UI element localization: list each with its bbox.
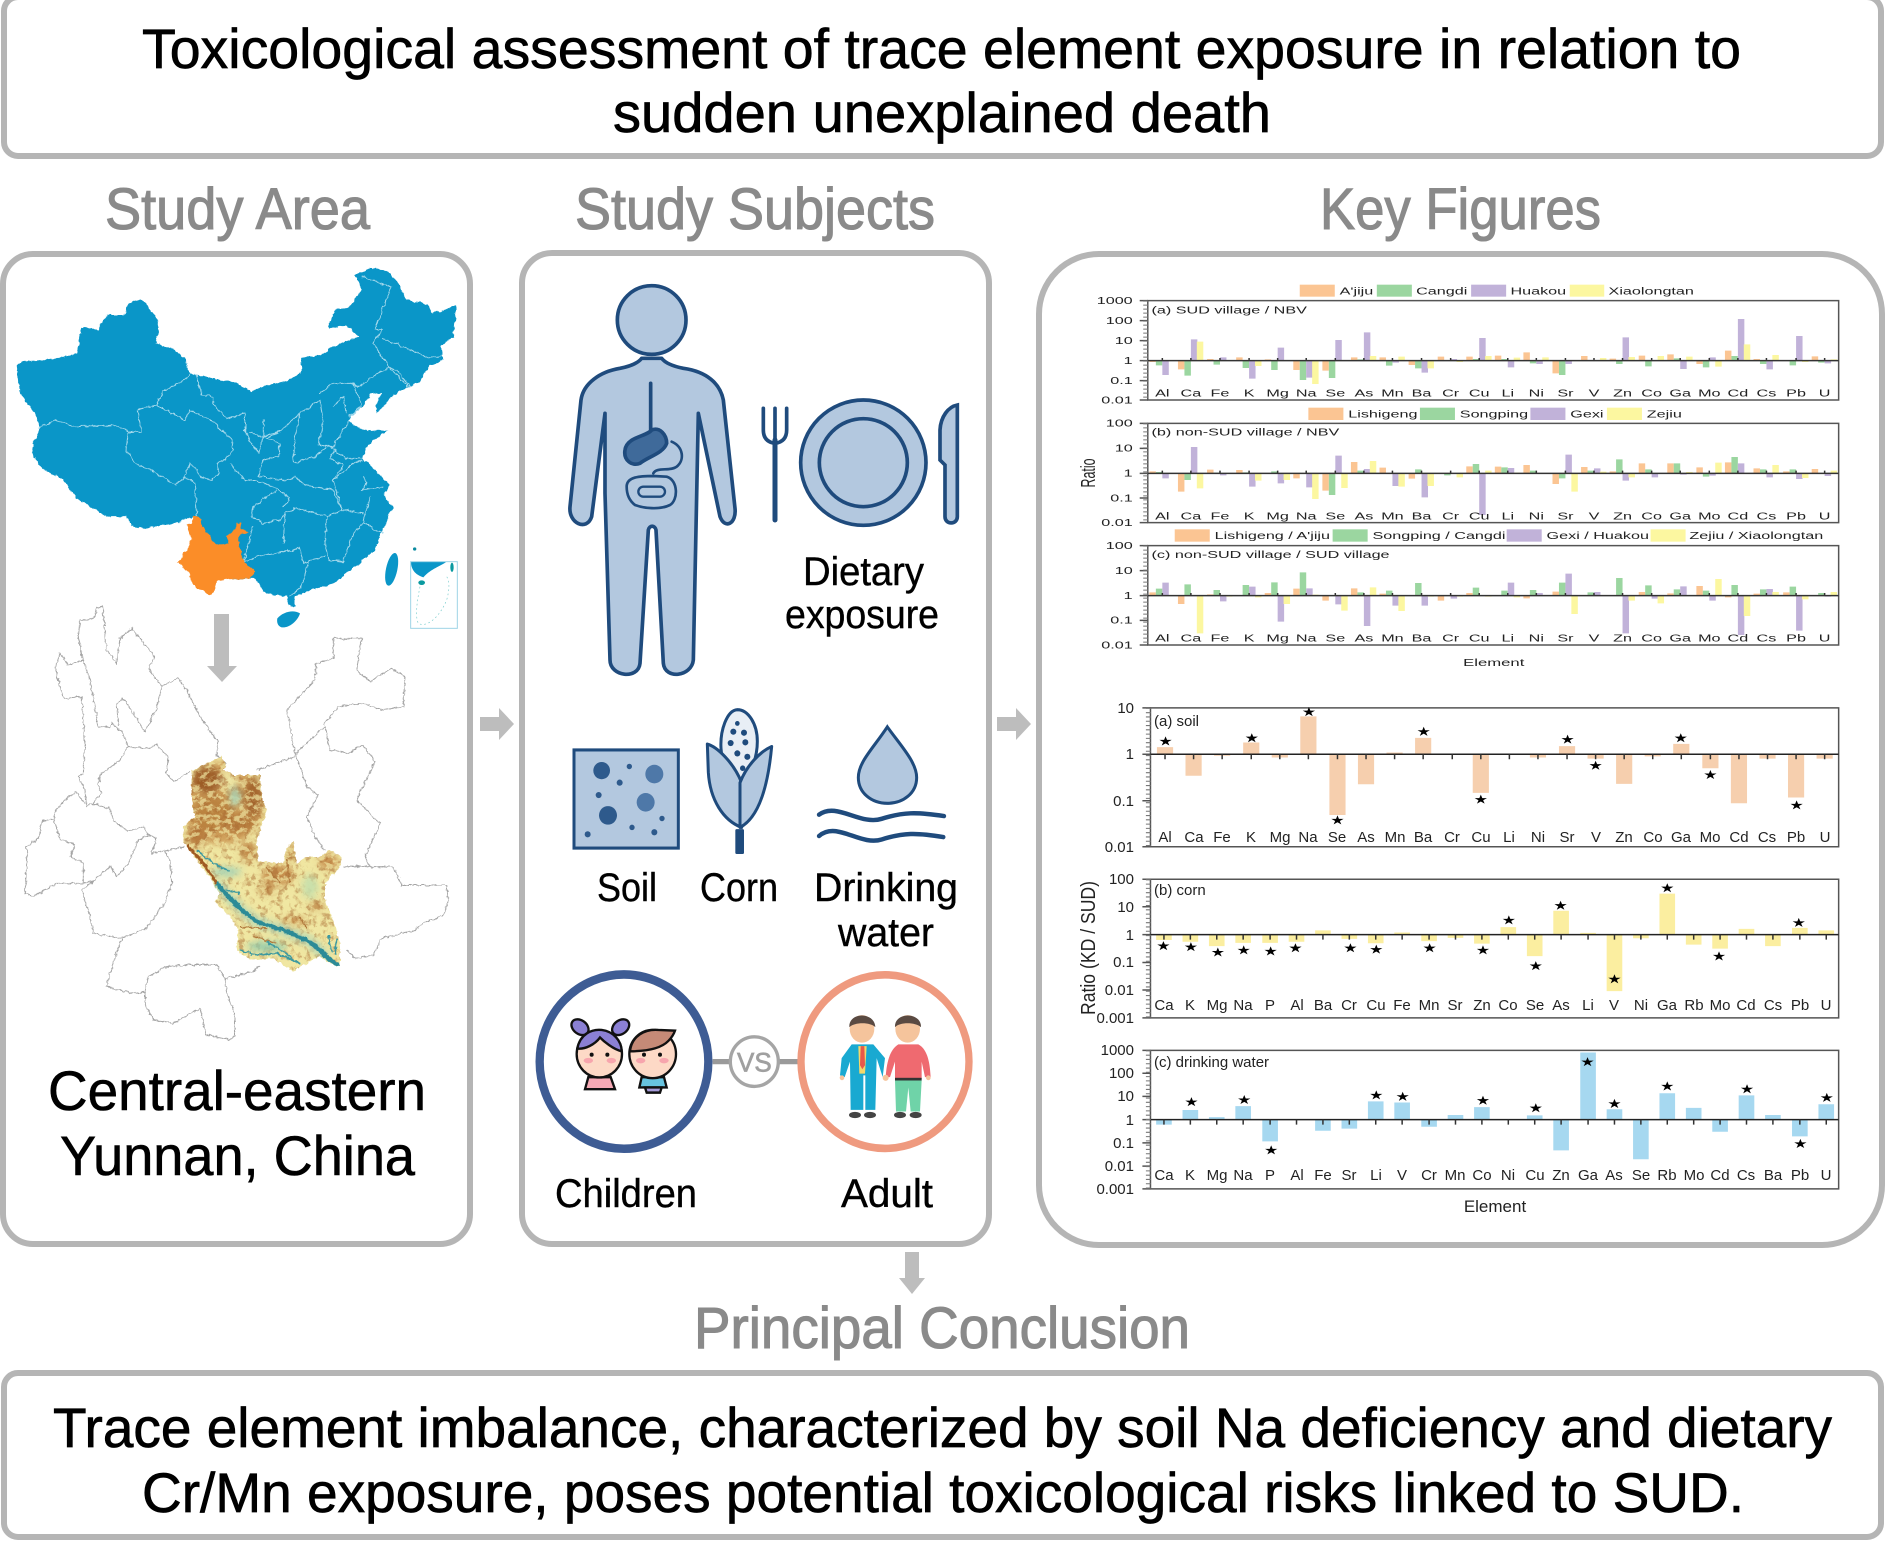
chart labels: corn: Cu bbox=[1366, 997, 1386, 1014]
chart labels: drinking water: Co bbox=[1472, 1167, 1492, 1184]
chart labels: drinking water: Cr bbox=[1421, 1167, 1437, 1184]
chart labels: drinking water bbox=[1096, 1042, 1831, 1198]
chart labels: soil: K bbox=[1246, 829, 1256, 846]
chart labels: drinking water: P bbox=[1265, 1167, 1275, 1184]
chart labels: drinking water: Cd bbox=[1710, 1167, 1730, 1184]
y labels: panel a: 1000 bbox=[1097, 295, 1133, 306]
x labels: panel a: Al bbox=[1155, 388, 1170, 399]
chart labels: soil: Mg bbox=[1270, 829, 1290, 846]
panel: study area bbox=[3, 254, 470, 1244]
legend: panel c bbox=[1175, 529, 1823, 542]
label: Central-eastern Yunnan, China: Central-eastern bbox=[48, 1059, 426, 1122]
x labels: panel c: Li bbox=[1501, 633, 1514, 644]
chart labels: corn: Ga bbox=[1657, 997, 1678, 1014]
axes: panel b bbox=[1140, 423, 1839, 523]
chart labels: drinking water: U bbox=[1821, 1167, 1831, 1184]
legend: panel c: Songping / Cangdi bbox=[1373, 530, 1506, 541]
y labels: panel b: 100 bbox=[1106, 418, 1133, 429]
chart labels: soil: Mn bbox=[1385, 829, 1405, 846]
y labels: panel b: 0.1 bbox=[1110, 492, 1133, 504]
x labels: panel b: Ni bbox=[1529, 510, 1544, 522]
legend: panel c: Gexi / Huakou bbox=[1547, 530, 1649, 541]
icon: VS connector: VS bbox=[737, 1047, 772, 1077]
icon: children in circle bbox=[540, 974, 708, 1149]
legend: panel a bbox=[1300, 285, 1694, 297]
chart labels: drinking water: Mg bbox=[1207, 1167, 1227, 1184]
panel c title: (c) non-SUD village / SUD village bbox=[1152, 549, 1390, 560]
x labels: panel c: As bbox=[1354, 633, 1374, 644]
icon: soil bbox=[574, 750, 678, 848]
x labels: panel b: Cs bbox=[1757, 510, 1777, 522]
y labels: panel a: 100 bbox=[1106, 315, 1133, 326]
x labels: panel b: Ca bbox=[1181, 510, 1202, 522]
chart labels: soil: As bbox=[1357, 829, 1375, 846]
chart labels: corn: Co bbox=[1498, 997, 1518, 1014]
y labels: panel a: 0.1 bbox=[1110, 375, 1133, 386]
chart labels: soil: Pb bbox=[1787, 829, 1805, 846]
x labels: panel c: Cd bbox=[1728, 633, 1748, 644]
x labels: panel c: Cu bbox=[1469, 633, 1490, 644]
axes: frames and ticks bbox=[1142, 708, 1839, 1189]
x labels: panel c: Pb bbox=[1786, 633, 1806, 644]
legend: panel b: Zejiu bbox=[1647, 408, 1682, 420]
chart labels: soil: Ni bbox=[1531, 829, 1545, 846]
x labels: panel c: Ca bbox=[1181, 633, 1202, 644]
heading: Principal Conclusion: Principal Conclusion bbox=[694, 1296, 1190, 1361]
chart labels: corn: Ca bbox=[1154, 997, 1174, 1014]
legend: panel a: Huakou bbox=[1510, 285, 1566, 297]
x labels: panel b bbox=[1155, 510, 1830, 522]
chart labels: soil: Cu bbox=[1471, 829, 1491, 846]
x labels: panel b: Ga bbox=[1669, 510, 1692, 522]
x labels: panel c: Zn bbox=[1613, 633, 1632, 644]
chart labels: corn: Al bbox=[1290, 997, 1304, 1014]
y labels: panel c: 0.1 bbox=[1110, 615, 1133, 626]
chart labels: drinking water: 1 bbox=[1126, 1112, 1134, 1129]
inset: South China Sea bbox=[411, 547, 457, 628]
icon: human digestive figure bbox=[570, 286, 735, 674]
chart labels: drinking water: Ca bbox=[1154, 1167, 1174, 1184]
title box bbox=[4, 0, 1881, 156]
significance stars bbox=[1157, 707, 1833, 1154]
chart labels: drinking water: Pb bbox=[1791, 1167, 1809, 1184]
y labels: panel b bbox=[1101, 418, 1133, 528]
chart labels: corn: U bbox=[1821, 997, 1831, 1014]
chart labels: corn: Ba bbox=[1314, 997, 1333, 1014]
chart labels: drinking water: Al bbox=[1290, 1167, 1304, 1184]
y labels: panel a bbox=[1097, 295, 1133, 406]
axes: panel a bbox=[1140, 301, 1839, 400]
x labels: panel c: Al bbox=[1155, 633, 1170, 644]
x labels: panel a: Ni bbox=[1529, 388, 1544, 399]
chart labels: corn: 0.1 bbox=[1113, 954, 1134, 971]
x labels: panel c: Mo bbox=[1698, 633, 1721, 644]
chart labels: corn: K bbox=[1185, 997, 1195, 1014]
legend: panel a: Cangdi bbox=[1416, 285, 1467, 297]
x labels: panel b: Co bbox=[1641, 510, 1662, 522]
x labels: panel c: Ni bbox=[1529, 633, 1544, 644]
chart labels: soil: 1 bbox=[1126, 746, 1134, 763]
label: Corn: Corn bbox=[700, 866, 778, 910]
y labels: panel c: 1 bbox=[1124, 590, 1133, 601]
chart labels: soil: Cd bbox=[1729, 829, 1749, 846]
panel: study subjects bbox=[522, 253, 989, 1244]
chart labels: drinking water: Sr bbox=[1342, 1167, 1357, 1184]
x labels: panel a: V bbox=[1589, 388, 1599, 399]
chart labels: drinking water: Ga bbox=[1578, 1167, 1599, 1184]
legend: panel b bbox=[1308, 408, 1682, 420]
x labels: panel c: Cs bbox=[1757, 633, 1777, 644]
y labels: panel b: 10 bbox=[1115, 443, 1133, 454]
heading: Study Area: Study Area bbox=[105, 177, 371, 242]
chart labels: drinking water: Ni bbox=[1501, 1167, 1515, 1184]
chart labels: drinking water: As bbox=[1605, 1167, 1623, 1184]
chart labels: soil: Fe bbox=[1213, 829, 1231, 846]
panel a title: (a) SUD village / NBV bbox=[1152, 304, 1307, 316]
chart labels: corn: Ni bbox=[1634, 997, 1648, 1014]
x labels: panel c: Mn bbox=[1381, 633, 1404, 644]
x labels: panel b: Cr bbox=[1442, 510, 1460, 522]
label: Children: Children bbox=[555, 1172, 697, 1216]
y labels: panel c: 10 bbox=[1115, 565, 1133, 576]
chart labels: soil: (a) soil bbox=[1154, 713, 1199, 730]
chart labels: corn: Cr bbox=[1341, 997, 1357, 1014]
chart labels: soil: Li bbox=[1503, 829, 1515, 846]
bars: panel c non-SUD village / SUD village bbox=[1153, 572, 1834, 635]
x labels: panel b: K bbox=[1244, 510, 1255, 522]
x labels: panel b: Se bbox=[1325, 510, 1345, 522]
chart labels: drinking water: Mn bbox=[1445, 1167, 1465, 1184]
map: Yunnan prefectures with study basin bbox=[25, 607, 448, 1040]
chart labels: drinking water: Mo bbox=[1684, 1167, 1704, 1184]
chart labels: drinking water: 1000 bbox=[1101, 1042, 1134, 1059]
x labels: panel b: Zn bbox=[1613, 510, 1632, 522]
x labels: panel a: U bbox=[1819, 388, 1830, 399]
title box: Toxicological assessment of trace element exposure in relation to bbox=[142, 17, 1741, 80]
x labels: panel b: Mg bbox=[1266, 510, 1289, 522]
legend: panel a: Xiaolongtan bbox=[1609, 285, 1694, 297]
chart: KD / SUD ratio bars and stars bbox=[1142, 707, 1839, 1189]
label: Drinking water bbox=[814, 866, 958, 955]
chart labels: corn: 0.01 bbox=[1105, 982, 1134, 999]
x labels: panel c: Fe bbox=[1211, 633, 1229, 644]
x labels: panel a: Cr bbox=[1442, 388, 1460, 399]
bars: panel a SUD village / NBV bbox=[1153, 319, 1834, 384]
x labels: panel b: Al bbox=[1155, 510, 1170, 522]
x labels: panel c: K bbox=[1244, 633, 1255, 644]
axis title: Ratio (upper chart): Ratio bbox=[1078, 458, 1100, 488]
chart labels: soil: Ca bbox=[1184, 829, 1204, 846]
axes: panel c bbox=[1140, 546, 1839, 645]
chart labels: drinking water: 10 bbox=[1117, 1088, 1134, 1105]
x labels: panel a: Cd bbox=[1728, 388, 1748, 399]
heading: Key Figures: Key Figures bbox=[1320, 177, 1601, 242]
y labels: panel c: 100 bbox=[1106, 540, 1133, 551]
chart labels: soil: Cr bbox=[1444, 829, 1460, 846]
x labels: panel c: U bbox=[1819, 633, 1830, 644]
chart labels: corn: Mn bbox=[1419, 997, 1439, 1014]
chart labels: corn: Se bbox=[1526, 997, 1544, 1014]
chart: soil ratio three stacked panels bbox=[1097, 285, 1839, 668]
chart labels: corn: Mg bbox=[1207, 997, 1227, 1014]
chart labels: corn: 10 bbox=[1117, 899, 1134, 916]
chart labels: drinking water: Fe bbox=[1314, 1167, 1332, 1184]
chart labels: corn: Pb bbox=[1791, 997, 1809, 1014]
x labels: panel a: Zn bbox=[1613, 388, 1632, 399]
x labels: panel b: Ba bbox=[1412, 510, 1432, 522]
chart labels: drinking water: 0.01 bbox=[1105, 1158, 1134, 1175]
chart labels: soil: Cs bbox=[1758, 829, 1776, 846]
x labels: panel a: Mo bbox=[1698, 388, 1721, 399]
chart labels: drinking water: Ba bbox=[1764, 1167, 1783, 1184]
chart labels: corn: Rb bbox=[1684, 997, 1704, 1014]
x labels: panel c: Ga bbox=[1669, 633, 1692, 644]
chart labels: corn: Fe bbox=[1393, 997, 1411, 1014]
label: Adult: Adult bbox=[841, 1172, 933, 1216]
x labels: panel b: Cd bbox=[1728, 510, 1748, 522]
chart labels: corn: (b) corn bbox=[1154, 882, 1206, 899]
label: Dietary exposure: exposure bbox=[785, 593, 939, 637]
x labels: panel b: Fe bbox=[1211, 510, 1229, 522]
x labels: panel b: Mn bbox=[1381, 510, 1404, 522]
study basin terrain bbox=[180, 753, 347, 973]
chart labels: drinking water: (c) drinking water bbox=[1154, 1054, 1269, 1071]
arrow: China to Yunnan bbox=[207, 614, 237, 682]
chart labels: soil: 0.1 bbox=[1113, 793, 1134, 810]
chart labels: corn: V bbox=[1609, 997, 1619, 1014]
chart labels: corn: Cd bbox=[1736, 997, 1756, 1014]
label: Central-eastern Yunnan, China bbox=[48, 1059, 426, 1187]
x labels: panel b: Sr bbox=[1557, 510, 1574, 522]
x labels: panel a: Se bbox=[1325, 388, 1345, 399]
chart labels: corn: As bbox=[1552, 997, 1570, 1014]
chart labels: soil: Se bbox=[1328, 829, 1346, 846]
icon: corn bbox=[707, 710, 772, 854]
legend: panel c: Lishigeng / A'jiju bbox=[1215, 530, 1330, 541]
x labels: panel a: Li bbox=[1501, 388, 1514, 399]
chart labels: drinking water: Cu bbox=[1525, 1167, 1545, 1184]
bars: soil bbox=[1165, 716, 1825, 815]
x labels: panel a: Fe bbox=[1211, 388, 1229, 399]
chart labels: drinking water: Rb bbox=[1657, 1167, 1677, 1184]
chart labels: corn: 1 bbox=[1126, 927, 1134, 944]
chart labels: corn: Sr bbox=[1448, 997, 1463, 1014]
x labels: panel a: As bbox=[1354, 388, 1374, 399]
arrow: area to subjects bbox=[480, 708, 514, 740]
x labels: panel a: K bbox=[1244, 388, 1255, 399]
x labels: panel c: Mg bbox=[1266, 633, 1289, 644]
panel: key figures bbox=[1039, 254, 1882, 1245]
legend: panel b: Gexi bbox=[1570, 408, 1604, 420]
chart labels: soil: Sr bbox=[1560, 829, 1575, 846]
x labels: panel b: Cu bbox=[1469, 510, 1490, 522]
y labels: panel b: 0.01 bbox=[1101, 517, 1133, 528]
x labels: panel c bbox=[1155, 633, 1830, 644]
arrow: subjects to conclusion bbox=[899, 1252, 925, 1294]
x labels: panel a: Mg bbox=[1266, 388, 1289, 399]
bars: panel b non-SUD village / NBV bbox=[1153, 447, 1834, 515]
chart labels: corn: Zn bbox=[1473, 997, 1491, 1014]
chart labels: corn: P bbox=[1265, 997, 1275, 1014]
x labels: panel a: Ga bbox=[1669, 388, 1692, 399]
chart labels: corn: Cs bbox=[1764, 997, 1782, 1014]
chart labels: drinking water: 0.001 bbox=[1096, 1181, 1134, 1198]
chart labels: soil: Co bbox=[1643, 829, 1663, 846]
x labels: panel b: Na bbox=[1296, 510, 1317, 522]
chart labels: drinking water: Cs bbox=[1737, 1167, 1755, 1184]
bars: corn bbox=[1164, 894, 1826, 991]
y labels: panel b: 1 bbox=[1124, 468, 1133, 479]
axis title: Element (lower chart): Element bbox=[1464, 1197, 1526, 1216]
x labels: panel c: Cr bbox=[1442, 633, 1460, 644]
x labels: panel a: Cs bbox=[1757, 388, 1777, 399]
x labels: panel b: V bbox=[1589, 510, 1599, 522]
x labels: panel b: Pb bbox=[1786, 510, 1806, 522]
label: Soil: Soil bbox=[597, 866, 657, 910]
y labels: panel a: 0.01 bbox=[1101, 394, 1133, 406]
x labels: panel c: V bbox=[1589, 633, 1599, 644]
chart labels: drinking water: V bbox=[1397, 1167, 1407, 1184]
x labels: panel c: Sr bbox=[1557, 633, 1574, 644]
x labels: panel c: Se bbox=[1325, 633, 1345, 644]
chart labels: soil: Na bbox=[1298, 829, 1318, 846]
x labels: panel c: Na bbox=[1296, 633, 1317, 644]
x labels: panel b: As bbox=[1354, 510, 1374, 522]
chart labels: corn bbox=[1096, 871, 1831, 1027]
conclusion box: Cr/Mn exposure, poses potential toxicological risks linked to SUD. bbox=[142, 1461, 1744, 1524]
x labels: panel a: Cu bbox=[1469, 388, 1490, 399]
conclusion box bbox=[4, 1373, 1881, 1537]
label: Drinking water: Drinking bbox=[814, 866, 958, 910]
icon: VS connector bbox=[713, 1037, 798, 1086]
title box: sudden unexplained death bbox=[613, 81, 1271, 144]
label: Drinking water: water bbox=[837, 911, 934, 955]
legend: panel a: A'jiju bbox=[1340, 285, 1373, 297]
x labels: panel b: Mo bbox=[1698, 510, 1721, 522]
legend: panel c: Zejiu / Xiaolongtan bbox=[1689, 530, 1823, 541]
label: Central-eastern Yunnan, China: Yunnan, China bbox=[60, 1124, 416, 1187]
heading: Study Subjects: Study Subjects bbox=[575, 177, 935, 242]
icon: fork plate knife bbox=[763, 400, 957, 525]
icon: adults in circle bbox=[801, 975, 969, 1148]
chart labels: corn: 100 bbox=[1109, 871, 1134, 888]
chart labels: soil bbox=[1105, 700, 1830, 856]
arrow: subjects to figures bbox=[997, 708, 1031, 740]
chart labels: soil: Mo bbox=[1700, 829, 1720, 846]
label: Dietary exposure bbox=[785, 550, 939, 637]
axis title: Element (upper chart): Element bbox=[1463, 656, 1525, 668]
axis title: Ratio (KD / SUD): Ratio (KD / SUD) bbox=[1078, 881, 1100, 1015]
chart labels: corn: 0.001 bbox=[1096, 1010, 1134, 1027]
chart labels: drinking water: Se bbox=[1632, 1167, 1650, 1184]
x labels: panel a: Na bbox=[1296, 388, 1317, 399]
x labels: panel c: Ba bbox=[1412, 633, 1432, 644]
x labels: panel a: Pb bbox=[1786, 388, 1806, 399]
legend: panel b: Songping bbox=[1460, 408, 1528, 420]
chart labels: soil: Ga bbox=[1671, 829, 1692, 846]
chart labels: drinking water: Li bbox=[1370, 1167, 1382, 1184]
x labels: panel b: U bbox=[1819, 510, 1830, 522]
chart labels: soil: U bbox=[1820, 829, 1830, 846]
chart labels: drinking water: 100 bbox=[1109, 1065, 1134, 1082]
chart labels: soil: 10 bbox=[1117, 700, 1134, 717]
chart labels: soil: Zn bbox=[1615, 829, 1633, 846]
y labels: panel c bbox=[1101, 540, 1133, 651]
icon: water drop bbox=[819, 727, 944, 841]
legend: panel b: Lishigeng bbox=[1348, 408, 1417, 420]
y labels: panel a: 1 bbox=[1124, 355, 1133, 366]
chart labels: soil: V bbox=[1591, 829, 1601, 846]
chart labels: drinking water: 0.1 bbox=[1113, 1135, 1134, 1152]
map: China with Yunnan highlighted bbox=[17, 268, 457, 628]
chart labels: corn: Li bbox=[1582, 997, 1594, 1014]
x labels: panel c: Co bbox=[1641, 633, 1662, 644]
chart labels: corn: Na bbox=[1233, 997, 1253, 1014]
y labels: panel c: 0.01 bbox=[1101, 639, 1133, 651]
y labels: panel a: 10 bbox=[1115, 335, 1133, 346]
panel b title: (b) non-SUD village / NBV bbox=[1152, 427, 1339, 438]
chart labels: soil: 0.01 bbox=[1105, 839, 1134, 856]
x labels: panel a: Co bbox=[1641, 388, 1662, 399]
x labels: panel b: Li bbox=[1501, 510, 1514, 522]
conclusion box: Trace element imbalance, characterized by soil Na deficiency and dietary bbox=[53, 1396, 1832, 1459]
x labels: panel a bbox=[1155, 388, 1830, 399]
chart labels: drinking water: Zn bbox=[1552, 1167, 1570, 1184]
x labels: panel a: Mn bbox=[1381, 388, 1404, 399]
x labels: panel a: Ba bbox=[1412, 388, 1432, 399]
x labels: panel a: Ca bbox=[1181, 388, 1202, 399]
chart labels: soil: Al bbox=[1158, 829, 1172, 846]
label: Dietary exposure: Dietary bbox=[803, 550, 924, 594]
chart labels: drinking water: K bbox=[1185, 1167, 1195, 1184]
x labels: panel a: Sr bbox=[1557, 388, 1574, 399]
bars: drinking water bbox=[1164, 1052, 1826, 1159]
chart labels: soil: Ba bbox=[1414, 829, 1433, 846]
chart labels: corn: Mo bbox=[1710, 997, 1730, 1014]
chart labels: drinking water: Na bbox=[1233, 1167, 1253, 1184]
